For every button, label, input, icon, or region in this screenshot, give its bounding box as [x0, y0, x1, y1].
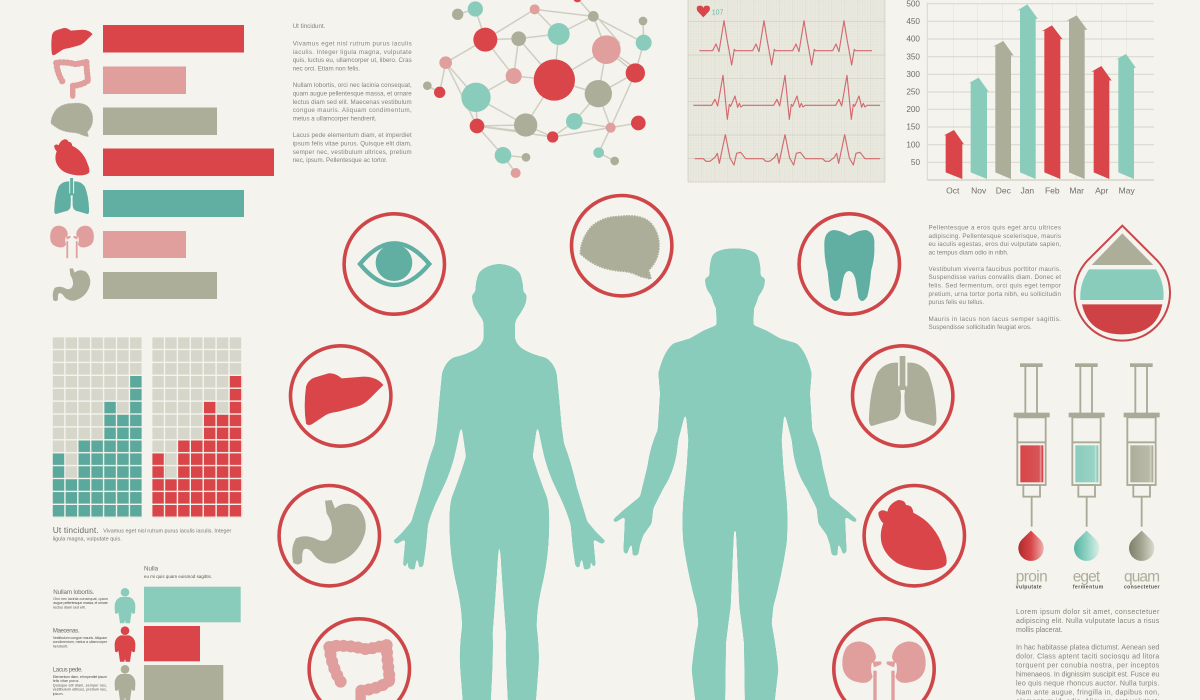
text block: top left copy: Lacus pede elementum diam, et imperdiet [293, 132, 412, 139]
waffle caption: Ut tincidunt. [53, 525, 99, 535]
month labels: Oct [946, 186, 960, 196]
bar: brain [103, 108, 217, 135]
waffle caption: Vivamus eget nisl rutrum purus iaculis iaculis. Integer [103, 528, 232, 534]
figure: man silhouette [613, 248, 857, 700]
syringe: mint [1069, 363, 1105, 561]
text block: bottom right copy: Nam ante augue, fringilla in, dapibus non, [1016, 690, 1159, 696]
blood drop diagram [1075, 226, 1170, 341]
month labels: Nov [971, 186, 987, 196]
text block: top left copy: quam augue pellentesque massa, et ornare [293, 90, 412, 98]
heading: Nulla [144, 566, 212, 579]
bar: taupe [144, 665, 223, 700]
text block: top left copy: Nullam lobortis, orci nec lacinia consequat, [293, 82, 412, 89]
badge: tooth [799, 214, 900, 314]
y axis labels: 350 [906, 52, 920, 61]
row label: Lacus pede: Quisque elit diam, semper nec, [53, 683, 107, 687]
arrows [943, 4, 1136, 179]
icon: red person [115, 626, 135, 662]
text block: right copy: adipiscing. Pellentesque scelerisque, mauris [928, 233, 1061, 240]
row label: Maecenas [53, 628, 108, 649]
syringe: red [1014, 363, 1050, 561]
chart grid [927, 3, 1154, 180]
badge: colon [309, 619, 409, 700]
text block: bottom right copy: adipiscing elit. Nulla vulputate lacus a risus [1016, 618, 1160, 625]
label: eget: fermentum [1073, 584, 1104, 590]
text block: top left copy: quis, luctus eu, ullamcorper ut, libero. Cras [293, 57, 412, 64]
network diagram [423, 0, 652, 178]
y axis labels [906, 0, 920, 167]
month labels [946, 186, 1135, 196]
icon: heart [54, 139, 89, 175]
month labels: Dec [996, 186, 1012, 196]
text block: top left copy: metus a ullamcorper hendrerit. [293, 116, 377, 122]
panel: body type bars [53, 566, 241, 700]
panel: organ bar chart [50, 25, 274, 301]
waffle chart: teal [53, 337, 143, 518]
month labels: Jan [1020, 186, 1034, 196]
text block: right copy: Pellentesque a eros quis eget arcu ultrices [928, 224, 1061, 232]
syringes [1014, 363, 1160, 590]
text block: right copy: ac tempus diam odio in nibh. [928, 250, 1009, 256]
heading: Nulla: Nulla [144, 566, 159, 572]
waffle caption: ligula magna, vulputate quis. [53, 536, 122, 542]
row label: Lacus pede: Lacus pede. [53, 666, 83, 674]
month labels: Mar [1069, 186, 1084, 196]
bar: lungs [103, 190, 244, 217]
label: proin: vulputate [1016, 584, 1042, 590]
row label: Maecenas: condimentum, metus a ullamcorper [53, 640, 108, 644]
badge: liver [290, 346, 391, 446]
text block: top left copy: nec orci. Etiam non felis. [293, 66, 360, 72]
y axis labels: 100 [906, 140, 920, 149]
y axis labels: 300 [906, 70, 920, 79]
text block: bottom right copy: torquent per conubia nostra, per inceptos [1016, 662, 1160, 670]
row label: Nullam lobortis: Orci nec lacinia consequat, quam [53, 597, 108, 601]
label: proin: proin [1016, 568, 1048, 586]
bar: heart [103, 148, 274, 176]
icon: taupe person [115, 665, 135, 700]
text block: bottom right copy: leo quis neque rhoncus auctor. Nulla turpis. [1016, 680, 1159, 688]
heading: Nulla: eu mi quis quam euismod sagittis. [144, 574, 212, 579]
icon: small heart [697, 6, 710, 17]
icon: liver [51, 28, 93, 55]
row label: Lacus pede: Elementum diam, et imperdiet ipsum [53, 675, 107, 679]
row label: Nullam lobortis: Nullam lobortis. [53, 589, 95, 596]
text block: bottom right copy [1016, 609, 1160, 700]
text block: bottom right copy: himenaeos. In dignissim suscipit est. Fusce eu [1016, 672, 1159, 678]
y axis labels: 400 [906, 35, 920, 44]
badge: heart [864, 486, 964, 586]
text block: bottom right copy: In hac habitasse platea dictumst. Aenean sed [1016, 644, 1159, 652]
bar: red [144, 626, 200, 661]
row label: Nullam lobortis: augue pellentesque massa, et ornare [53, 601, 108, 605]
waffle caption [53, 525, 232, 542]
badge: lungs [852, 346, 953, 446]
label: eget: eget [1073, 568, 1101, 586]
text block: right copy [928, 224, 1061, 331]
row label: Maecenas: Vestibulum congue mauris. Aliquam [53, 636, 107, 640]
month labels: Feb [1045, 186, 1060, 196]
row label: Maecenas: Maecenas. [53, 628, 80, 634]
y axis labels: 450 [906, 17, 920, 26]
figure: woman silhouette [393, 264, 606, 700]
icon: colon [56, 62, 88, 96]
icon: mint person [115, 588, 135, 623]
text block: top left copy [293, 23, 412, 164]
arrow bar chart [906, 0, 1154, 196]
row label: Nullam lobortis [53, 589, 108, 609]
text block: right copy: felis. Sed fermentum, orci quis eget tempor [928, 282, 1061, 290]
text block: right copy: Mauris in lacus non lacus semper sagittis. [928, 316, 1061, 323]
bar: kidneys [103, 231, 186, 258]
text block: right copy: Suspendisse sollicitudin feugiat eros. [928, 324, 1032, 331]
text block: right copy: eu iaculis egestas, eros dui vulputate sapien, [928, 241, 1061, 248]
bar: colon [103, 66, 186, 94]
icon: lungs [54, 178, 89, 214]
icon: brain [51, 103, 92, 136]
text block: top left copy: nec, ipsum. Pellentesque ac tortor. [293, 157, 388, 164]
text block: top left copy: congue mauris. Aliquam condimentum, [293, 107, 412, 114]
row label: Maecenas: hendrerit. [53, 645, 68, 649]
y axis labels: 200 [906, 105, 920, 114]
text block: bottom right copy: mollis placerat. [1016, 627, 1063, 634]
icon: kidneys [50, 226, 94, 258]
row label: Lacus pede: vestibulum ultrices, pretium nec, [53, 688, 107, 692]
text block: right copy: Suspendisse varius convallis diam. Donec et [928, 274, 1061, 281]
text block: right copy: purus felis eu tellus. [928, 299, 984, 306]
row label: Nullam lobortis: lectus diam sed elit. [53, 605, 86, 609]
text block: top left copy: lectus diam sed elit. Maecenas vestibulum [293, 99, 412, 106]
bar: stomach [103, 272, 217, 299]
text block: right copy: pretium, urna tortor porta nibh, eu sollicitudin [928, 291, 1061, 298]
badge: kidneys [834, 619, 934, 700]
month labels: Apr [1095, 186, 1108, 196]
y axis labels: 150 [906, 123, 920, 132]
badge: brain [572, 196, 672, 296]
bar: mint [144, 587, 241, 622]
waffle chart: red [152, 337, 243, 518]
text block: top left copy: Vivamus eget nisl rutrum purus iaculis [293, 40, 412, 48]
y axis labels: 50 [911, 158, 920, 167]
text block: top left copy: Ut tincidunt. [293, 23, 326, 30]
label: quam: quam [1124, 568, 1160, 586]
bar: liver [103, 25, 244, 52]
label: eget [1073, 568, 1104, 590]
waffle charts [53, 337, 243, 542]
text block: bottom right copy: dolor. Class aptent taciti sociosqu ad litora [1016, 654, 1159, 660]
text block: top left copy: semper nec, vestibulum ultrices, pretium [293, 149, 412, 156]
row label: Lacus pede [53, 666, 107, 696]
icon: stomach [53, 268, 90, 301]
badge: eye [344, 214, 444, 314]
text block: top left copy: ipsum felis vitae purus. Quisque elit diam, [293, 140, 412, 148]
ECG traces [693, 21, 880, 165]
row label: Lacus pede: ipsum. [53, 692, 64, 696]
badge: stomach [279, 486, 379, 586]
y axis labels: 250 [906, 88, 920, 97]
row label: Lacus pede: felis vitae purus. [53, 679, 79, 683]
text block: right copy: Vestibulum viverra faucibus porttitor mauris. [928, 266, 1061, 273]
label: quam: consectetuer [1124, 584, 1160, 590]
month labels: May [1119, 186, 1135, 196]
text block: bottom right copy: Lorem ipsum dolor sit amet, consectetuer [1016, 609, 1160, 616]
text block: top left copy: iaculis. Integer ligula magna, vulputate [293, 49, 412, 56]
panel: ECG chart [688, 0, 885, 182]
syringe: taupe [1124, 363, 1160, 561]
heart rate value: 107 [712, 10, 723, 16]
